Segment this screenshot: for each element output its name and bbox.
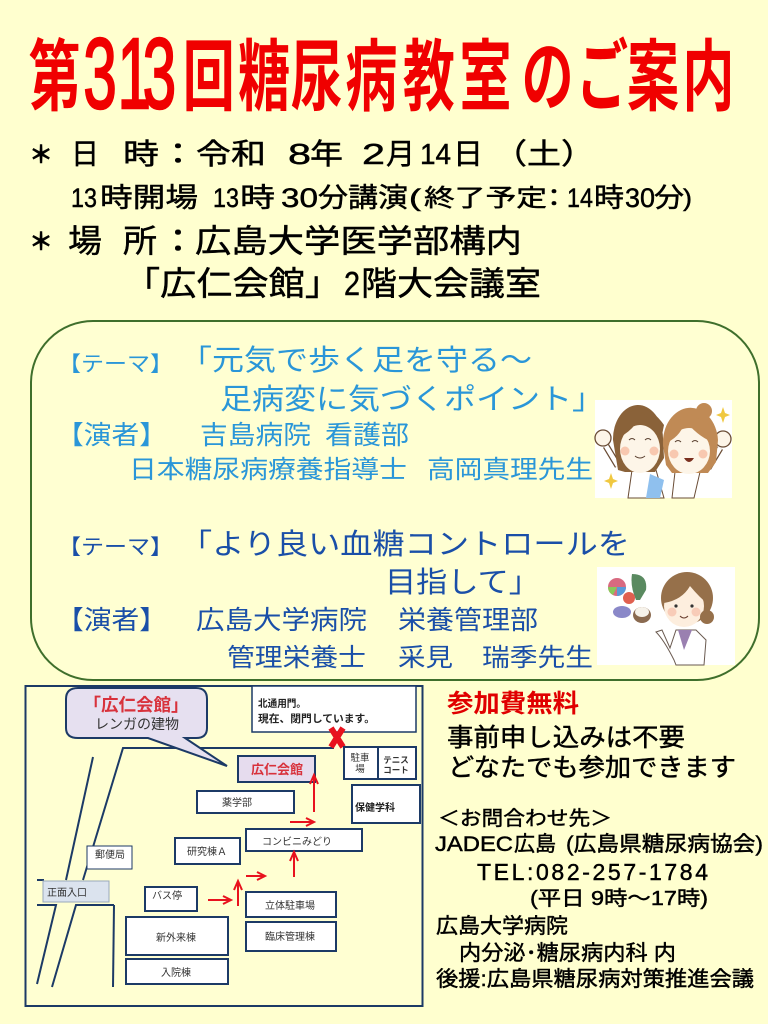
lecture 1 theme: 【テーマ】 <box>58 353 173 376</box>
time line: ( <box>409 185 421 212</box>
callout: Kojinkaikan: 「広仁会館」 <box>84 695 188 715</box>
title: ご <box>576 35 628 122</box>
free admission text <box>447 690 736 782</box>
time line: 13 <box>213 183 239 213</box>
contact information <box>435 807 763 991</box>
date line <box>29 138 595 171</box>
building: post office <box>87 846 132 869</box>
building: pharmacy: 薬学部 <box>222 796 252 809</box>
title: 室 <box>460 35 512 122</box>
time line: 30 <box>625 183 655 213</box>
title: の <box>522 35 574 122</box>
time line: 時 <box>240 183 275 213</box>
route arrows <box>208 775 318 906</box>
contact information: 広島 <box>514 833 556 856</box>
lecture 1 theme: 「元気で歩く足を守る～ <box>180 344 532 377</box>
time line: 13 <box>71 183 97 213</box>
building: inpatient <box>126 959 228 984</box>
venue line <box>124 265 541 302</box>
date line: 2 <box>362 139 385 171</box>
time line: 30 <box>281 183 318 213</box>
time line: ： <box>540 185 568 212</box>
lecture 2 theme: 目指して」 <box>385 566 540 599</box>
contact information: (平日 9時～17時) <box>530 887 708 910</box>
lecture 1 speaker: 高岡真理先生 <box>427 456 593 484</box>
date line: 8 <box>288 139 311 171</box>
event details <box>29 138 692 302</box>
lecture 2 speaker: 栄養管理部 <box>398 605 538 635</box>
date line: 14 <box>420 139 451 171</box>
building: parking structure <box>246 892 336 917</box>
title: 3 <box>83 18 117 130</box>
lecture 1 speaker <box>56 420 593 484</box>
building: convenience store: コンビニみどり <box>262 836 332 848</box>
lecture 1 speaker: 看護部 <box>325 420 409 450</box>
lecture 1 speaker: 日本糖尿病療養指導士 <box>129 456 407 484</box>
contact information: 広島大学病院 <box>436 915 568 938</box>
lecture 2 speaker: 広島大学病院 <box>196 605 367 635</box>
time line <box>71 183 692 213</box>
icon: dietitian with food <box>597 567 735 665</box>
title: 内 <box>682 35 734 122</box>
contact information: (広島県糖尿病協会) <box>566 833 763 856</box>
building: bus stop: バス停 <box>152 889 182 902</box>
time line: 時開場 <box>100 183 198 213</box>
building: inpatient: 入院棟 <box>161 966 191 979</box>
lecture 2 speaker: 采見 <box>398 644 453 672</box>
date line: 月 <box>386 139 415 171</box>
place line: ＊ <box>29 229 53 256</box>
building: main entrance: 正面入口 <box>47 888 87 899</box>
building: research A <box>175 838 240 864</box>
building: health sciences <box>352 785 420 823</box>
free admission text: 事前申し込みは不要 <box>447 724 685 752</box>
contact information: JADEC <box>435 833 513 856</box>
building: new outpatient <box>126 917 228 955</box>
lecture 2 speaker: 管理栄養士 <box>227 644 366 672</box>
building: parking <box>344 747 378 779</box>
building: new outpatient: 新外来棟 <box>156 931 196 944</box>
title: 糖 <box>238 35 290 122</box>
date line: 年 <box>310 138 343 171</box>
time line: ) <box>683 185 692 212</box>
building: parking: 場 <box>355 763 365 775</box>
icon: red cross mark <box>331 728 343 747</box>
building: parking structure: 立体駐車場 <box>265 899 315 912</box>
building: clinical management <box>246 922 336 951</box>
building: pharmacy <box>197 791 294 813</box>
lecture 2 theme: 【テーマ】 <box>58 536 173 559</box>
lecture 2 speaker <box>56 605 593 672</box>
time line: 時 <box>594 183 624 213</box>
contact information: 内分泌･糖尿病内科 内 <box>459 942 676 965</box>
date line: 日 <box>453 139 483 171</box>
building: post office: 郵便局 <box>95 848 125 861</box>
lecture 2 speaker: 【演者】 <box>56 605 167 635</box>
building: clinical management: 臨床管理棟 <box>265 930 315 943</box>
lecture 2 theme: 「より良い血糖コントロールを <box>180 528 630 561</box>
building: research A: 研究棟Ａ <box>187 845 227 858</box>
building: north gate note <box>252 686 416 732</box>
place line: ： <box>160 223 196 259</box>
time line: 14 <box>567 183 593 213</box>
title <box>29 18 734 130</box>
map <box>26 686 422 1006</box>
building: health sciences: 保健学科 <box>355 801 395 814</box>
lecture 1 speaker: 【演者】 <box>56 420 167 450</box>
date line: ＊ <box>29 142 53 169</box>
callout: Kojinkaikan: レンガの建物 <box>95 716 179 732</box>
contact information: 後援:広島県糖尿病対策推進会議 <box>436 968 754 991</box>
place line: 所 <box>123 223 157 259</box>
lecture 1 speaker: 吉島病院 <box>200 420 311 450</box>
lecture 1 theme: 足病変に気づくポイント」 <box>220 383 604 416</box>
date line: 時 <box>123 138 159 171</box>
building: convenience store <box>246 829 362 851</box>
date line: 令和 <box>196 138 266 171</box>
date line: ： <box>160 139 196 171</box>
date line: （土） <box>493 138 595 171</box>
place line <box>29 223 522 259</box>
lecture 1 theme <box>58 344 604 416</box>
title: 病 <box>346 35 398 122</box>
title: 案 <box>627 35 679 122</box>
contact information: ＜お問合わせ先＞ <box>438 807 612 830</box>
date line: 日 <box>71 139 99 171</box>
lecture 2 theme <box>58 528 630 599</box>
callout: Kojinkaikan <box>66 688 227 766</box>
title: 教 <box>403 35 455 122</box>
building: north gate note: 現在、閉門しています。 <box>258 712 375 725</box>
venue line: 「広仁会館」 <box>124 265 341 302</box>
roads <box>37 748 334 987</box>
building: bus stop <box>145 887 197 911</box>
place line: 場 <box>68 223 102 259</box>
building: tennis court: コート <box>383 765 409 775</box>
venue line: 2 <box>344 265 360 302</box>
panel: lectures <box>31 321 759 680</box>
building: north gate note: 北通用門。 <box>258 697 306 710</box>
free admission text: 参加費無料 <box>447 690 579 718</box>
place line: 広島大学医学部構内 <box>195 223 522 259</box>
icon: two nurses cheering <box>595 400 732 498</box>
title: 回 <box>183 35 235 122</box>
title: 尿 <box>291 35 343 122</box>
time line: 終了予定 <box>424 185 547 212</box>
building: Kojinkaikan: 広仁会館 <box>251 762 303 777</box>
venue line: 階大会議室 <box>361 265 541 302</box>
title: 第 <box>29 35 81 122</box>
title: 1 <box>118 18 151 130</box>
building: tennis court: テニス <box>383 755 409 765</box>
building: main entrance <box>43 881 109 902</box>
building: parking: 駐車 <box>350 752 370 764</box>
contact information: TEL:082-257-1784 <box>477 859 708 885</box>
building: Kojinkaikan <box>238 756 315 782</box>
time line: 分講演 <box>318 183 408 213</box>
lecture 2 speaker: 瑞季先生 <box>482 644 593 672</box>
free admission text: どなたでも参加できます <box>448 754 736 782</box>
time line: 分 <box>654 183 684 213</box>
title: 3 <box>143 18 176 130</box>
building: tennis court <box>378 747 416 779</box>
